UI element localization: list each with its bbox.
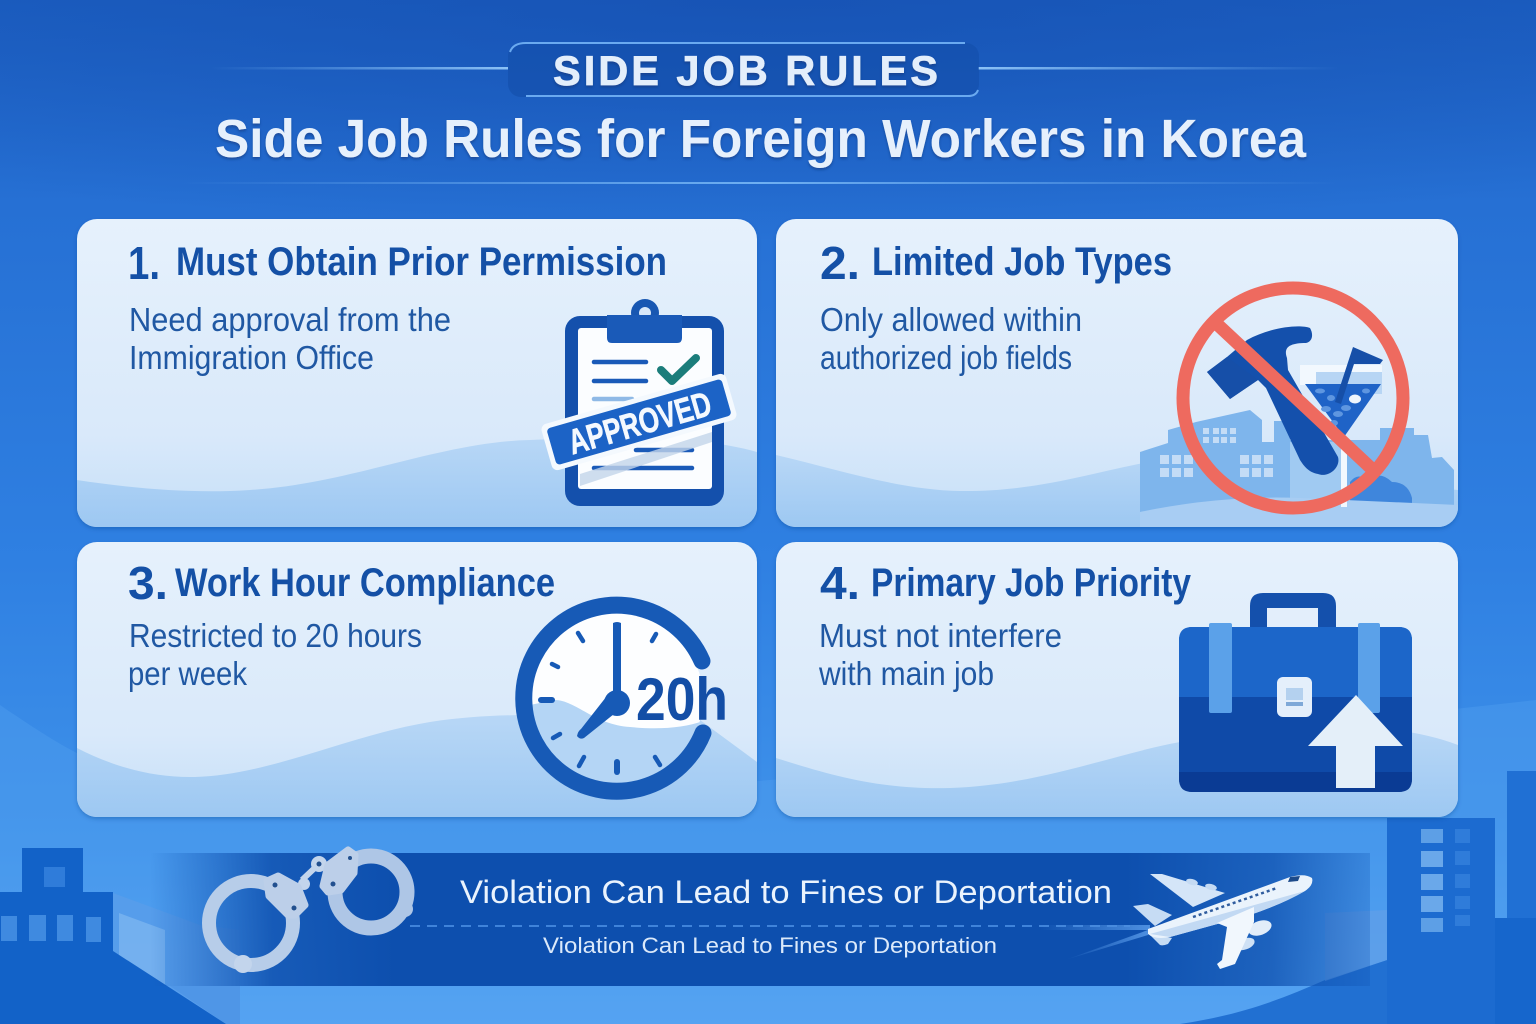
heading: 2. xyxy=(820,237,860,289)
warning banner xyxy=(150,850,1370,986)
heading: 1. xyxy=(128,237,160,289)
description xyxy=(818,617,1062,692)
panel 2: limited job types xyxy=(776,219,1458,527)
description xyxy=(129,301,451,376)
icon: briefcase with up arrow xyxy=(1179,593,1412,792)
background skyline: left xyxy=(0,848,240,1024)
background skyline: right xyxy=(1180,771,1536,1024)
icon: clock 20h xyxy=(524,605,728,791)
heading xyxy=(128,557,555,609)
banner headline: Violation Can Lead to Fines or Deportation xyxy=(460,874,1112,910)
icon: approved clipboard xyxy=(540,299,738,506)
panel 4: primary job priority xyxy=(776,542,1458,817)
panel 1: prior permission xyxy=(77,219,757,527)
description: Restricted to 20 hours xyxy=(129,617,422,654)
description: Only allowed within xyxy=(820,301,1082,338)
icon: airplane xyxy=(1040,874,1312,969)
description: Need approval from the xyxy=(129,301,451,338)
heading: Work Hour Compliance xyxy=(175,561,555,605)
heading: Limited Job Types xyxy=(872,240,1172,284)
description xyxy=(128,617,422,692)
description: Must not interfere xyxy=(819,617,1062,654)
heading: 4. xyxy=(820,557,860,609)
heading xyxy=(128,237,667,289)
heading: Must Obtain Prior Permission xyxy=(176,240,667,284)
ribbon label: SIDE JOB RULES xyxy=(553,47,941,94)
description: with main job xyxy=(818,655,994,692)
description xyxy=(820,301,1082,376)
description: Immigration Office xyxy=(129,339,374,376)
icon: clock 20h: 20h xyxy=(636,666,728,733)
title: Side Job Rules for Foreign Workers in Korea xyxy=(215,109,1307,169)
icon: handcuffs xyxy=(209,850,413,973)
icon: hammer and cocktail prohibited xyxy=(1183,288,1403,508)
header ribbon xyxy=(210,43,1340,97)
heading: Primary Job Priority xyxy=(871,561,1192,605)
description: authorized job fields xyxy=(820,339,1072,376)
heading xyxy=(820,557,1192,609)
banner subtext: Violation Can Lead to Fines or Deportation xyxy=(543,933,997,958)
heading xyxy=(820,237,1172,289)
heading: 3. xyxy=(128,557,168,609)
panel 3: work hour compliance xyxy=(77,542,757,817)
icon: buildings xyxy=(1140,410,1458,527)
description: per week xyxy=(128,655,247,692)
icon: approved clipboard: APPROVED xyxy=(564,384,716,462)
